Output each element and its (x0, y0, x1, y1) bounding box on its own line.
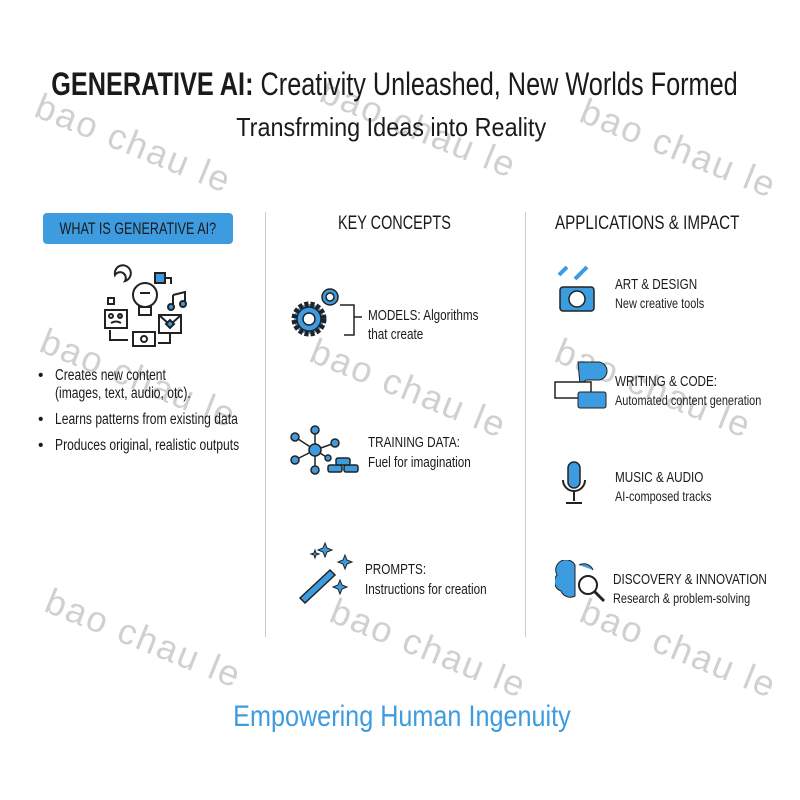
panel: applications & impact (554, 213, 767, 606)
text: bao chau le (35, 320, 243, 436)
item: prompts: PROMPTS: (365, 561, 426, 578)
bullet list (38, 367, 239, 454)
item: models: that create (368, 326, 423, 343)
text: bao chau le (30, 85, 238, 201)
bullet list: (images, text, audio, otc). (55, 385, 191, 402)
footer tagline: Empowering Human Ingenuity (233, 700, 571, 733)
item: music & audio (562, 461, 712, 504)
item: music & audio: AI-composed tracks (615, 488, 712, 504)
heading box (43, 213, 233, 244)
item: discovery: Research & problem-solving (613, 590, 750, 606)
heading box: WHAT IS GENERATIVE AI? (60, 219, 216, 238)
subtitle: Transfrming Ideas into Reality (236, 112, 546, 142)
item: training data: Fuel for imagination (368, 454, 471, 471)
item: writing & code: WRITING & CODE: (615, 373, 717, 390)
item: writing & code (554, 362, 761, 408)
item: models (292, 288, 479, 343)
item: music & audio: MUSIC & AUDIO (615, 469, 703, 486)
panel: what is generative ai (38, 213, 239, 454)
bullet list: Learns patterns from existing data (55, 411, 238, 428)
item: art & design: ART & DESIGN (615, 276, 697, 293)
bullet list: • (38, 411, 43, 428)
text: bao chau le (575, 90, 783, 206)
item: prompts (299, 542, 487, 604)
title: GENERATIVE AI: Creativity Unleashed, New Worlds Formed (51, 66, 737, 102)
text: bao chau le (315, 70, 523, 186)
text: bao chau le (325, 590, 533, 706)
item: art & design: New creative tools (615, 295, 704, 311)
item: discovery: DISCOVERY & INNOVATION (613, 571, 767, 588)
text: bao chau le (305, 330, 513, 446)
item: training data (290, 425, 471, 475)
item: discovery (555, 560, 767, 606)
item: prompts: Instructions for creation (365, 581, 487, 598)
bullet list: • (38, 437, 43, 454)
heading: APPLICATIONS & IMPACT (555, 213, 739, 234)
heading: KEY CONCEPTS (338, 213, 451, 234)
panel: key concepts (290, 213, 487, 604)
icon: idea cluster (104, 264, 187, 347)
text: bao chau le (550, 330, 758, 446)
item: writing & code: Automated content generation (615, 392, 761, 408)
item: training data: TRAINING DATA: (368, 434, 460, 451)
bullet list: • (38, 367, 43, 384)
item: art & design (558, 266, 704, 312)
text: bao chau le (40, 580, 248, 696)
text: bao chau le (575, 590, 783, 706)
bullet list: Produces original, realistic outputs (55, 437, 239, 454)
item: models: MODELS: Algorithms (368, 307, 479, 324)
bullet list: Creates new content (55, 367, 166, 384)
